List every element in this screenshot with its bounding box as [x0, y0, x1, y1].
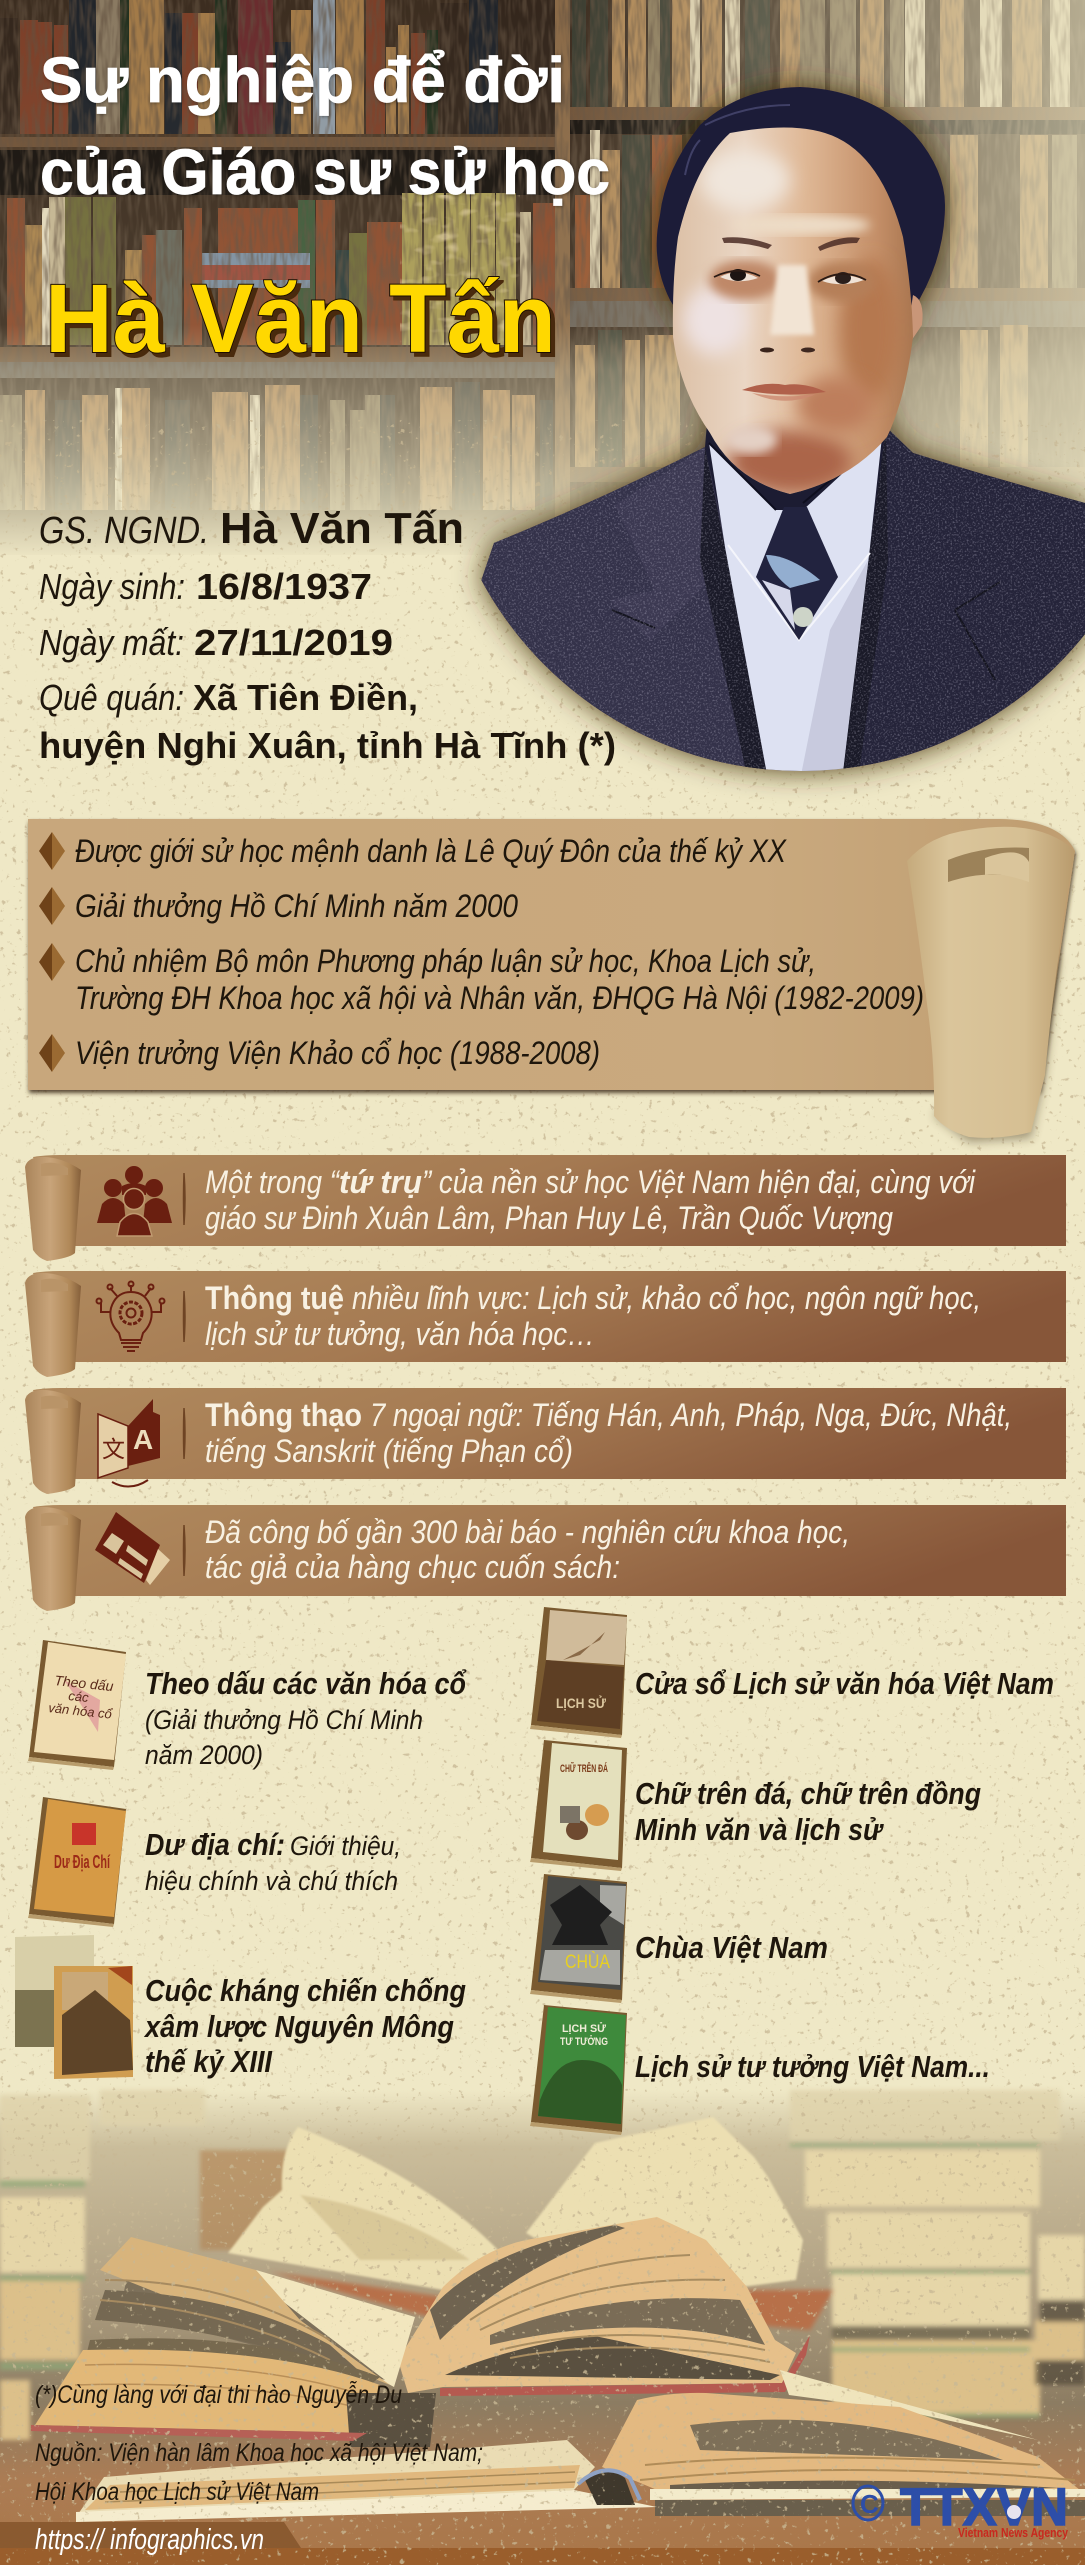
banner: thong tue: Thông tuệ — [205, 1280, 344, 1316]
logo TTXVN: C — [860, 2489, 879, 2519]
source: Hội Khoa học Lịch sử Việt Nam — [35, 2478, 319, 2506]
banner: publications: Đã công bố gần 300 bài báo - nghiên cứu khoa học, — [205, 1514, 850, 1550]
personal info: 27/11/2019 — [194, 622, 393, 663]
logo TTXVN: TTXVN — [900, 2478, 1068, 2537]
text: Du dia chi: Dư địa chí: — [145, 1827, 285, 1862]
icon: translation: A — [133, 1424, 153, 1455]
title: Sự nghiệp để đời — [40, 44, 565, 116]
name heading: Hà Văn Tấn — [45, 264, 556, 373]
text: Cuoc khang chien: Cuộc kháng chiến chống — [145, 1973, 466, 2008]
icon: people — [97, 1166, 172, 1236]
footnote: (*)Cùng làng với đại thi hào Nguyễn Du — [35, 2380, 402, 2409]
book: Cua so lich su: LỊCH SỬ — [556, 1694, 606, 1711]
personal info — [39, 504, 616, 766]
book: Theo dau cac van hoa co: Theo dấu — [54, 1672, 114, 1694]
text: Du dia chi: Giới thiệu, — [290, 1831, 401, 1861]
personal info: 16/8/1937 — [196, 566, 372, 607]
banner: publications — [25, 1505, 1066, 1611]
banner: tu tru: Một trong “ — [205, 1164, 341, 1200]
banner: thong tue — [25, 1271, 1066, 1377]
text: Theo dau — [145, 1666, 467, 1770]
text: Cuoc khang chien: thế kỷ XIII — [145, 2044, 273, 2079]
title: của Giáo sư sử học — [40, 136, 610, 208]
text: Du dia chi — [145, 1827, 401, 1896]
banner: publications: tác giả của hàng chục cuốn sách: — [205, 1549, 620, 1585]
banner: tu tru: giáo sư Đinh Xuân Lâm, Phan Huy Lê, Trần Quốc Vượng — [205, 1200, 893, 1236]
banner: thong thao: Thông thạo — [205, 1397, 362, 1433]
banner: thong tue: lịch sử tư tưởng, văn hóa học… — [205, 1316, 595, 1352]
book: Cua so lich su — [530, 1607, 627, 1738]
jacket — [478, 447, 768, 780]
text: Chu tren da — [635, 1776, 981, 1847]
bullet list: Trường ĐH Khoa học xã hội và Nhân văn, ĐHQG Hà Nội (1982-2009) — [75, 980, 924, 1016]
banner: tu tru: tứ trụ — [339, 1164, 422, 1200]
icon: translation: 文 — [102, 1436, 125, 1462]
banner: thong tue: nhiều lĩnh vực: Lịch sử, khảo cổ học, ngôn ngữ học, — [352, 1280, 981, 1316]
book: Lich su tu tuong: TƯ TƯỞNG — [560, 2035, 608, 2048]
text: Lich su: Lịch sử tư tưởng Việt Nam... — [635, 2049, 990, 2084]
banner: thong thao — [25, 1388, 1066, 1494]
personal info: GS. NGND. — [39, 510, 209, 552]
book: Chua Viet Nam: CHÙA — [565, 1951, 610, 1973]
book: Theo dau cac van hoa co: văn hóa cổ — [48, 1700, 113, 1722]
text: Theo dau: (Giải thưởng Hồ Chí Minh — [145, 1705, 423, 1735]
book: Theo dau cac van hoa co: các — [68, 1688, 90, 1705]
book: Chua Viet Nam — [530, 1874, 627, 2003]
banner: thong thao: tiếng Sanskrit (tiếng Phạn cổ) — [205, 1433, 573, 1469]
text: Du dia chi: hiệu chính và chú thích — [145, 1866, 398, 1896]
book: Du dia chi: Dư Địa Chí — [54, 1852, 111, 1872]
personal info: huyện Nghi Xuân, tỉnh Hà Tĩnh (*) — [39, 725, 616, 766]
personal info: Quê quán: — [39, 677, 184, 718]
bullet list: Viện trưởng Viện Khảo cổ học (1988-2008) — [75, 1035, 600, 1071]
title — [40, 44, 610, 208]
icon: newspaper — [95, 1512, 170, 1585]
panel: scroll with achievements — [28, 819, 1075, 1142]
text: Theo dau: Theo dấu các văn hóa cổ — [145, 1666, 467, 1701]
book: Lich su tu tuong: LỊCH SỬ — [562, 2022, 607, 2035]
book: Chu tren da — [530, 1740, 627, 1871]
icon: scroll roll — [907, 827, 1075, 1142]
source — [35, 2439, 483, 2506]
personal info: Hà Văn Tấn — [220, 504, 464, 553]
portrait of Professor Ha Van Tan — [470, 87, 1085, 800]
text: Chu tren da: Chữ trên đá, chữ trên đồng — [635, 1776, 981, 1811]
book: Cuoc khang chien — [15, 1935, 133, 2079]
banner: tu tru — [25, 1155, 1066, 1261]
banner: tu tru: ” của nền sử học Việt Nam hiện đại, cùng với — [422, 1164, 976, 1200]
text: Cuoc khang chien: xâm lược Nguyên Mông — [143, 2009, 454, 2044]
book: Lich su tu tuong — [530, 2005, 627, 2135]
text: Cuoc khang chien — [143, 1973, 466, 2079]
personal info: Ngày mất: — [39, 622, 184, 663]
face — [905, 295, 923, 350]
tie — [756, 507, 838, 640]
text: Chua: Chùa Việt Nam — [635, 1930, 828, 1965]
book: Theo dau cac van hoa co — [28, 1640, 126, 1770]
bullet list — [39, 832, 924, 1072]
website bar: https:// infographics.vn — [35, 2524, 264, 2556]
text: Theo dau: năm 2000) — [145, 1740, 263, 1770]
bullet list: Chủ nhiệm Bộ môn Phương pháp luận sử học, Khoa Lịch sử, — [75, 943, 816, 979]
bullet list: Được giới sử học mệnh danh là Lê Quý Đôn của thế kỷ XX — [75, 833, 787, 869]
book: Du dia chi — [28, 1797, 126, 1927]
icon: light bulb with gear — [96, 1282, 164, 1351]
source: Nguồn: Viện hàn lâm Khoa học xã hội Việt Nam; — [35, 2439, 483, 2467]
text: Chu tren da: Minh văn và lịch sử — [635, 1812, 884, 1847]
personal info: Ngày sinh: — [39, 566, 185, 607]
bullet list: Giải thưởng Hồ Chí Minh năm 2000 — [75, 888, 518, 924]
book: Chu tren da: CHỮ TRÊN ĐÁ — [560, 1762, 608, 1775]
icon: translation — [98, 1399, 160, 1487]
shirt and sweater — [709, 437, 882, 780]
bookshelf background photo — [0, 0, 1085, 560]
bottom photo: open books and stacks — [0, 2090, 1085, 2565]
personal info: Xã Tiên Điền, — [193, 677, 418, 718]
